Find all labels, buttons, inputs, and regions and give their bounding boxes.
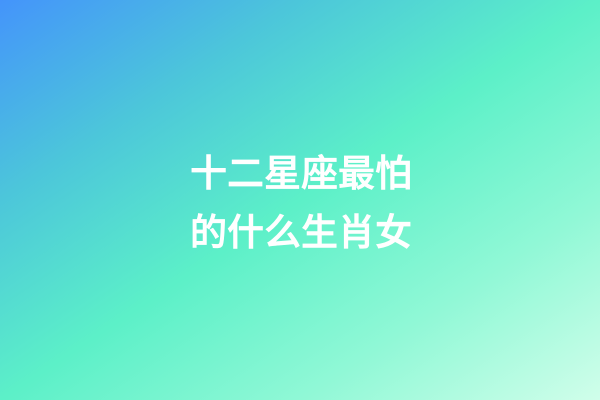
title: 的什么生肖女 [190,212,412,253]
title [190,153,412,253]
title: 十二星座最怕 [190,153,412,194]
